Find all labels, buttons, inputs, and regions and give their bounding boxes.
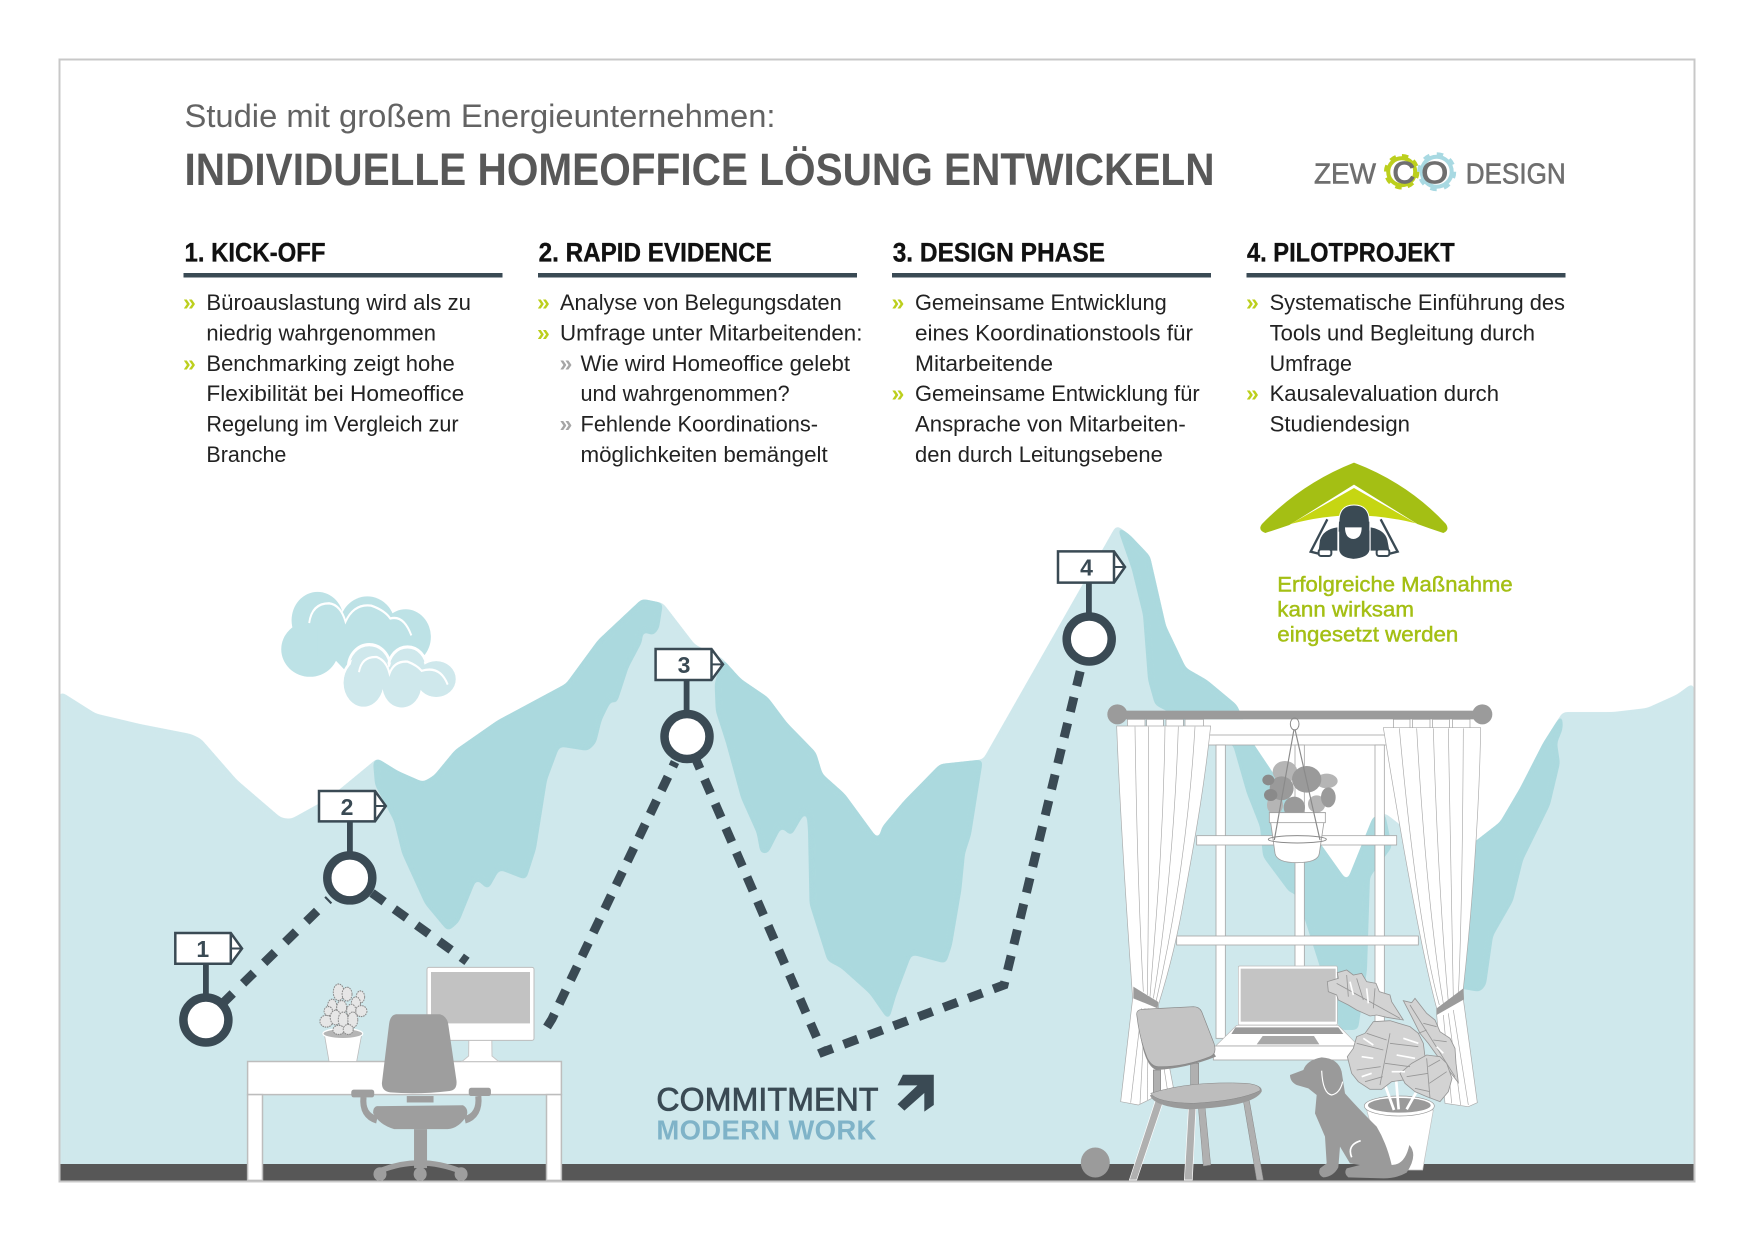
- list: kick-off bullets: Benchmarking zeigt hohe: [206, 351, 455, 376]
- icon: desk with monitor and office chair: [248, 967, 561, 1181]
- panel: column 1 kick-off: [183, 238, 502, 467]
- list: rapid evidence bullets: [537, 289, 862, 467]
- icon: desk: [248, 1062, 561, 1180]
- label: commitment modern work: [656, 1082, 878, 1146]
- floor: [59, 1164, 1695, 1181]
- list: rapid evidence bullets: »: [537, 319, 550, 345]
- marker 2: 2: [341, 794, 353, 820]
- heading: pilotprojekt: 4. PILOTPROJEKT: [1247, 238, 1455, 268]
- list: kick-off bullets: Büroauslastung wird als zu: [206, 290, 471, 315]
- list: pilotprojekt bullets: Kausalevaluation durch: [1270, 381, 1499, 406]
- list: rapid evidence bullets: Umfrage unter Mitarbeitenden:: [560, 320, 862, 345]
- icon: clouds: [281, 592, 457, 708]
- marker 4: [1058, 551, 1125, 662]
- heading: rapid evidence: 2. RAPID EVIDENCE: [539, 238, 772, 268]
- callout: erfolgreiche Maßnahme: kann wirksam: [1277, 599, 1414, 622]
- icon: curtain rod: [1107, 704, 1492, 728]
- list: rapid evidence bullets: »: [560, 411, 572, 437]
- icon: monitor: [427, 967, 534, 1062]
- icon: hanging plant: [1262, 718, 1338, 863]
- panel: column 2 rapid evidence: [537, 238, 862, 467]
- list: design phase bullets: Mitarbeitende: [915, 351, 1053, 376]
- callout: erfolgreiche Maßnahme: eingesetzt werden: [1277, 624, 1458, 647]
- logo: ZEW CO DESIGN: [1314, 155, 1566, 190]
- dashed commitment path: [222, 668, 1081, 1052]
- marker 1: 1: [196, 936, 209, 962]
- list: rapid evidence bullets: möglichkeiten bemängelt: [580, 442, 828, 467]
- subtitle: Studie mit großem Energieunternehmen:: [184, 98, 776, 134]
- list: pilotprojekt bullets: »: [1246, 380, 1259, 406]
- logo: ZEW CO DESIGN: DESIGN: [1466, 158, 1566, 190]
- list: kick-off bullets: [183, 289, 471, 467]
- list: design phase bullets: [892, 289, 1200, 467]
- panel: column 3 design phase: [892, 238, 1211, 467]
- label: commitment modern work: MODERN WORK: [656, 1115, 877, 1146]
- list: design phase bullets: »: [892, 289, 904, 315]
- marker 4: 4: [1080, 554, 1093, 580]
- list: kick-off bullets: »: [183, 289, 196, 315]
- list: kick-off bullets: Flexibilität bei Homeoffice: [206, 381, 464, 406]
- list: rapid evidence bullets: und wahrgenommen?: [580, 381, 790, 406]
- icon: office chair: [351, 1014, 491, 1181]
- heading: kick-off: 1. KICK-OFF: [184, 238, 326, 268]
- marker 3: 3: [678, 652, 690, 678]
- icon: dog: [1290, 1057, 1413, 1178]
- label: commitment modern work: COMMITMENT: [656, 1082, 878, 1118]
- logo: ZEW CO DESIGN: O: [1422, 155, 1448, 190]
- list: design phase bullets: eines Koordinationstools für: [915, 320, 1193, 345]
- list: kick-off bullets: Regelung im Vergleich zur: [206, 412, 459, 437]
- list: design phase bullets: Ansprache von Mitarbeiten-: [915, 412, 1186, 437]
- callout: erfolgreiche Maßnahme: Erfolgreiche Maßnahme: [1277, 574, 1513, 597]
- title: INDIVIDUELLE HOMEOFFICE LÖSUNG ENTWICKELN: [184, 144, 1214, 195]
- list: pilotprojekt bullets: [1246, 289, 1565, 437]
- logo: ZEW CO DESIGN: ZEW: [1314, 158, 1377, 190]
- list: pilotprojekt bullets: »: [1246, 289, 1259, 315]
- icon: window frame: [1177, 719, 1418, 1060]
- list: design phase bullets: Gemeinsame Entwicklung für: [915, 381, 1200, 406]
- icon: right curtain: [1383, 728, 1481, 1107]
- callout: erfolgreiche Maßnahme: [1277, 574, 1513, 647]
- list: pilotprojekt bullets: Umfrage: [1270, 351, 1352, 376]
- list: kick-off bullets: Branche: [206, 442, 286, 467]
- list: design phase bullets: Gemeinsame Entwicklung: [915, 290, 1167, 315]
- panel: column 4 pilotprojekt: [1246, 238, 1566, 437]
- list: rapid evidence bullets: Analyse von Belegungsdaten: [560, 290, 842, 315]
- list: rapid evidence bullets: Fehlende Koordinations-: [580, 412, 818, 437]
- arrow: commitment up-right: [898, 1075, 934, 1112]
- list: kick-off bullets: niedrig wahrgenommen: [206, 320, 436, 345]
- marker 2: [319, 791, 386, 900]
- icon: laptop: [1216, 966, 1358, 1046]
- list: pilotprojekt bullets: Studiendesign: [1270, 412, 1410, 437]
- list: kick-off bullets: »: [183, 350, 196, 376]
- logo: ZEW CO DESIGN: C: [1392, 155, 1415, 190]
- illustration: home office window scene: [1107, 704, 1492, 1180]
- marker 1: [175, 933, 242, 1042]
- icon: left curtain: [1117, 726, 1211, 1105]
- list: design phase bullets: »: [892, 380, 904, 406]
- panel: landscape background: [59, 525, 1694, 1181]
- list: pilotprojekt bullets: Systematische Einführung des: [1270, 290, 1565, 315]
- list: rapid evidence bullets: »: [537, 289, 550, 315]
- icon: hang glider: [1260, 463, 1447, 559]
- list: rapid evidence bullets: Wie wird Homeoffice gelebt: [580, 351, 850, 376]
- icon: cactus plant: [320, 984, 367, 1062]
- list: rapid evidence bullets: »: [560, 350, 572, 376]
- icon: potted monstera: [1327, 970, 1458, 1170]
- marker 3: [656, 649, 723, 759]
- icon: chair: [1129, 1007, 1263, 1180]
- heading: design phase: 3. DESIGN PHASE: [893, 238, 1105, 268]
- list: design phase bullets: den durch Leitungsebene: [915, 442, 1163, 467]
- icon: ball: [1081, 1148, 1110, 1178]
- list: pilotprojekt bullets: Tools und Begleitung durch: [1270, 320, 1535, 345]
